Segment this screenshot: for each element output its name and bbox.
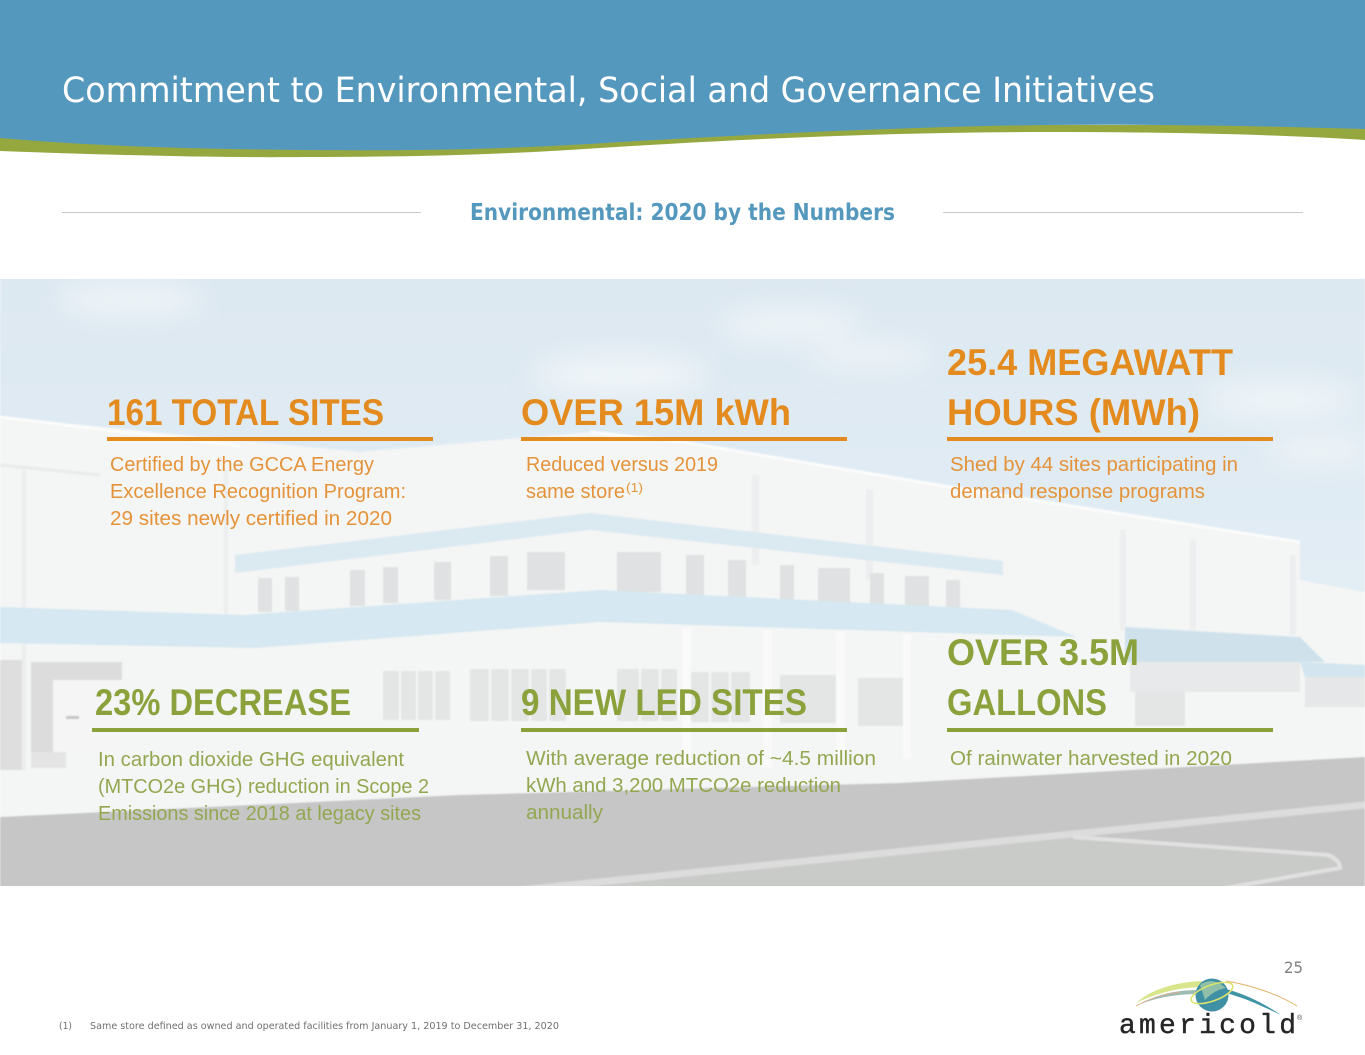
logo: americold — [1119, 978, 1303, 1042]
stat: over 3.5M gallons: GALLONS — [947, 682, 1107, 723]
stat: over 3.5M gallons: Of rainwater harvested in 2020 — [950, 748, 1232, 770]
right wall shadow band — [1130, 662, 1300, 692]
stat: 161 total sites: Certified by the GCCA Energy — [110, 454, 374, 476]
logo: americold: ® — [1297, 1014, 1303, 1022]
stat: 25.4 megawatt hours: demand response programs — [950, 481, 1205, 503]
stat: over 15M kWh: OVER 15M kWh — [521, 392, 791, 433]
stat: 9 new LED sites: With average reduction of ~4.5 million — [526, 748, 876, 770]
footnote: (1) — [59, 1021, 72, 1032]
main warehouse wall — [0, 417, 1365, 830]
stat: 23% decrease: Emissions since 2018 at legacy sites — [98, 803, 421, 825]
lower canopy — [0, 590, 1077, 648]
stat: over 15M kWh: Reduced versus 2019 — [526, 454, 718, 476]
right canopies — [1125, 627, 1325, 662]
ground floor windows — [383, 669, 1185, 726]
section heading with divider lines: Environmental: 2020 by the Numbers — [470, 200, 895, 226]
stat: 23% decrease: In carbon dioxide GHG equivalent — [98, 749, 404, 771]
upper windows — [258, 552, 960, 612]
footnote: Same store defined as owned and operated facilities from January 1, 2019 to December 31, 2020 — [90, 1021, 559, 1032]
stat: over 3.5M gallons — [947, 632, 1273, 770]
title: Commitment to Environmental, Social and Governance Initiatives — [62, 71, 1155, 111]
stat: over 3.5M gallons: OVER 3.5M — [947, 632, 1139, 673]
parking lot ground — [0, 757, 1365, 895]
stat: 161 total sites: 29 sites newly certified in 2020 — [110, 508, 392, 530]
stat: 25.4 megawatt hours: Shed by 44 sites participating in — [950, 454, 1238, 476]
blue band — [0, 0, 1365, 150]
parking island — [520, 805, 1365, 890]
stat: 23% decrease — [92, 682, 429, 825]
stat: 161 total sites — [107, 392, 433, 530]
stat: over 15M kWh: same store — [526, 481, 625, 503]
stat: 23% decrease: (MTCO2e GHG) reduction in Scope 2 — [98, 776, 429, 798]
loading dock — [0, 660, 122, 770]
stat: over 15M kWh — [521, 392, 847, 503]
logo: americold: americold — [1119, 1011, 1296, 1042]
stat: 161 total sites: 161 TOTAL SITES — [107, 392, 384, 433]
header banner — [0, 0, 1365, 157]
background photo: cold storage facility — [0, 270, 1365, 895]
stat: over 15M kWh: (1) — [626, 480, 643, 495]
stat: 9 new LED sites: 9 NEW LED SITES — [521, 682, 807, 723]
page number: 25 — [1284, 958, 1303, 977]
stat: 23% decrease: 23% DECREASE — [95, 682, 351, 723]
stat: 161 total sites: Excellence Recognition Program: — [110, 481, 406, 503]
stat: 25.4 megawatt hours: HOURS (MWh) — [947, 392, 1200, 433]
stat: 25.4 megawatt hours — [947, 342, 1273, 503]
upper canopy — [235, 513, 1003, 575]
stat: 25.4 megawatt hours: 25.4 MEGAWATT — [947, 342, 1233, 383]
green wave — [0, 125, 1365, 157]
stat: 9 new LED sites: annually — [526, 802, 603, 824]
stat: 9 new LED sites — [521, 682, 876, 824]
wall downspouts — [22, 470, 1296, 770]
stat: 9 new LED sites: kWh and 3,200 MTCO2e reduction — [526, 775, 841, 797]
entrance columns — [690, 672, 845, 724]
